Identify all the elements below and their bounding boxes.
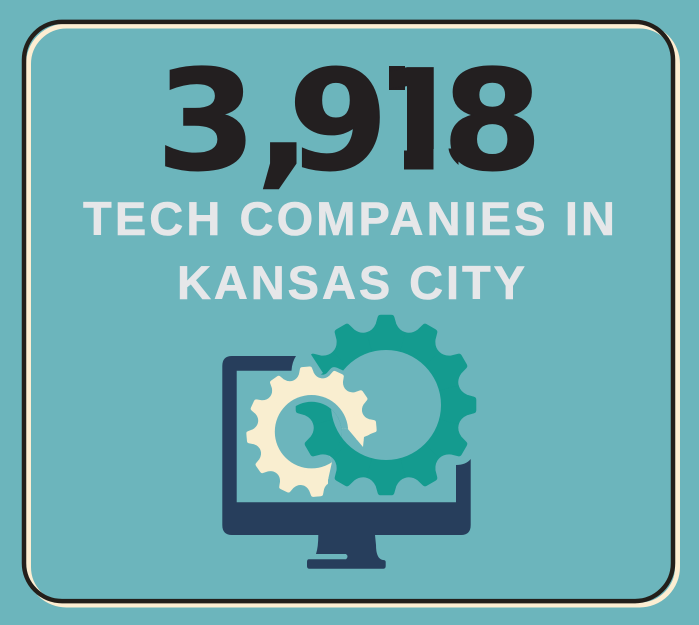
icon: computer monitor with gears bbox=[222, 315, 476, 569]
subtitle line 2: KANSAS CITY bbox=[177, 256, 525, 309]
icon: monitor bbox=[222, 356, 471, 569]
subtitle line 1: TECH COMPANIES IN bbox=[83, 192, 615, 245]
subtitle bbox=[83, 192, 615, 309]
icon: teal gear bbox=[296, 315, 476, 495]
big number: 3,918 bbox=[156, 41, 543, 202]
icon: teal gear section inside cream gear bbox=[296, 402, 342, 456]
icon: cream gear bbox=[246, 366, 377, 497]
